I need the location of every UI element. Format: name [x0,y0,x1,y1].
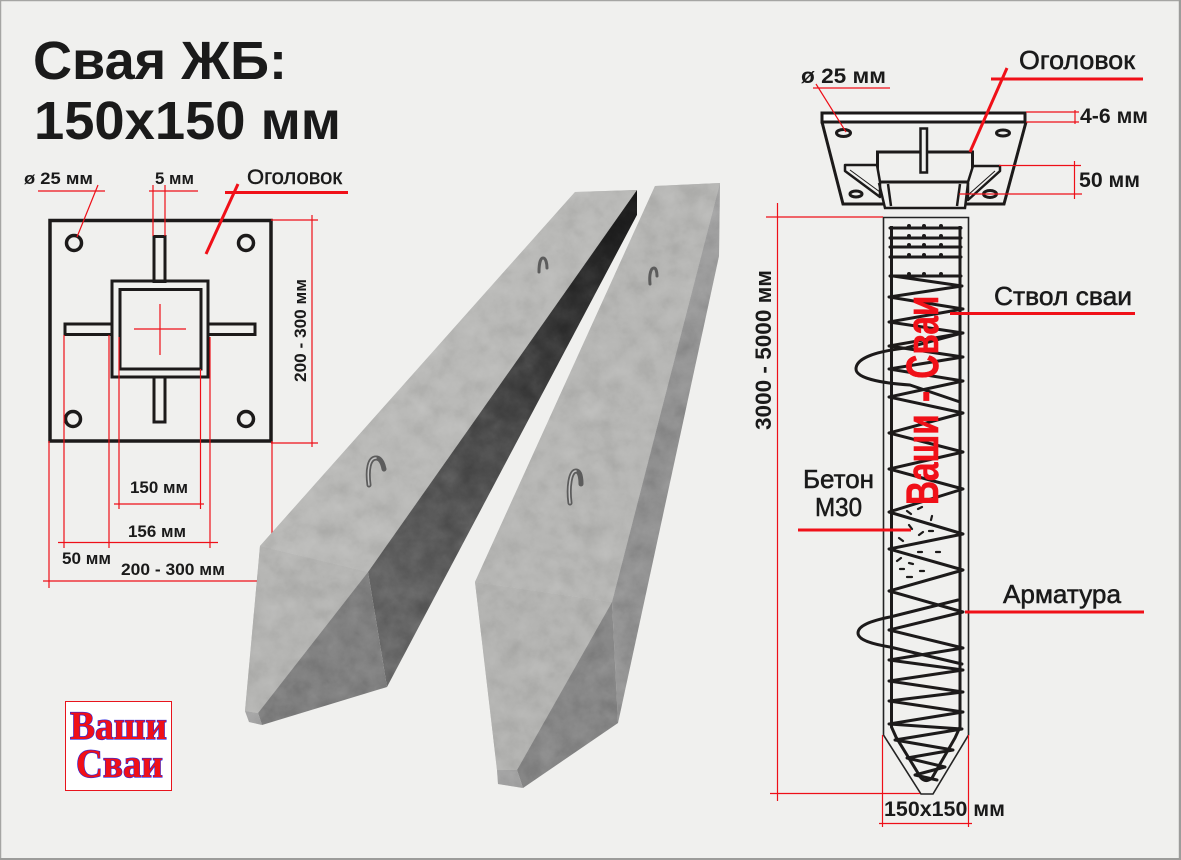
label: 5 mm: 5 мм [155,169,194,188]
tip light face [475,582,612,770]
callout: rebar: Арматура [1003,579,1122,609]
label: 156 mm: 156 мм [128,522,186,541]
concrete pile, right [475,183,720,788]
tip end [497,770,523,788]
title: Свая ЖБ: [33,31,287,91]
tip shaded face [517,602,618,788]
callout: concrete [798,464,911,530]
spiral loop, upper [856,333,962,402]
hook: left pile front [368,458,384,485]
logo: Ваши [70,703,167,748]
lower socket [879,183,968,208]
hook: right pile front [569,471,581,503]
callout: shaft: Ствол сваи [994,281,1132,311]
callout: concrete: М30 [815,492,862,522]
label: diameter 25 mm: ø 25 мм [24,169,93,188]
plan drawing: pile head top view [50,220,271,441]
lifting hooks [368,258,657,503]
hook: left pile rear [539,258,547,272]
leader: head [206,184,348,254]
plan dimensions [24,166,348,588]
label: 4-6 mm: 4-6 мм [1080,105,1148,128]
stiffener ribs [65,236,255,422]
dimension lines [38,185,318,588]
logo: Сваи [76,741,163,786]
concrete specks [897,507,940,577]
shaft outline [884,218,968,794]
vertical rib [920,128,927,172]
label: diameter 25 mm: ø 25 мм [801,65,886,88]
label: plate width: 200 - 300 мм [121,560,225,579]
socket [878,152,972,182]
tip shaded face [258,572,387,725]
longitudinal rebar [892,226,960,780]
tip end [245,711,262,725]
gussets [845,165,1000,200]
central sockets [112,281,208,377]
right side [612,183,720,723]
label: 50 mm: 50 мм [62,549,111,568]
spiral reinforcement [889,276,963,780]
hook: right pile rear [650,268,657,284]
tip light face [245,546,368,713]
label: 50 mm: 50 мм [1079,169,1140,192]
callout: concrete: Бетон [803,464,874,494]
concrete pile, left [245,190,637,725]
thin dimension lines [766,84,1082,827]
top face [260,190,637,572]
spiral loop, lower [858,600,962,664]
title [33,31,341,151]
label: 150 mm: 150 мм [130,478,188,497]
label: cross section: 150x150 мм [884,798,1005,821]
top plate [822,113,1026,204]
mounting holes [66,236,254,426]
stirrups at the top [890,224,961,276]
callout: head: Оголовок [1019,45,1136,75]
brand text on shaft: Ваши - Сваи [898,296,948,505]
callout: head [970,45,1143,152]
top face [475,183,720,602]
logo [66,702,172,790]
title: 150x150 мм [34,91,341,151]
dark side [368,190,637,687]
base plate [50,220,271,441]
label: head: Оголовок [247,166,343,189]
section drawing: pile shaft [856,218,968,794]
section dimensions and callouts [751,45,1148,827]
label: pile length: 3000 - 5000 мм [751,270,776,430]
centre cross [134,304,186,355]
label: plate height: 200 - 300 мм [291,279,310,382]
section drawing: pile head side view [822,113,1026,208]
plate holes [836,130,1010,198]
